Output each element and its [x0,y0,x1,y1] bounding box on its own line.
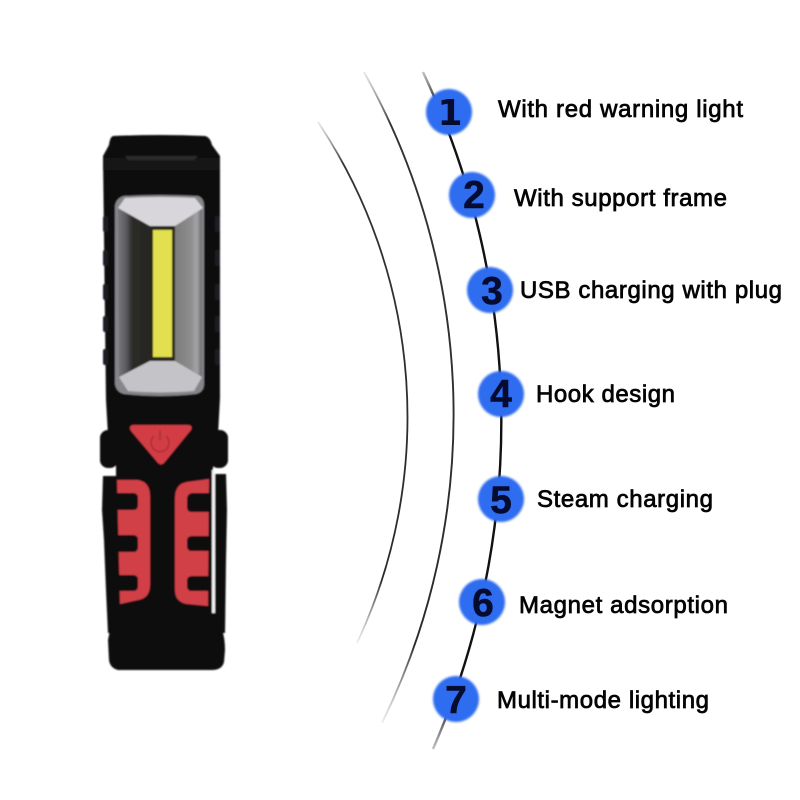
badge 3: 3 [481,270,503,313]
connector arc: outer [423,72,501,749]
label 5: Steam charging [537,486,713,513]
decorative arc: middle [364,72,454,723]
LED frame [150,226,175,361]
light upper housing [103,135,220,435]
label 4: Hook design [536,381,675,408]
white strip [212,470,215,613]
badge 7 [433,676,479,722]
label 1: With red warning light [498,96,743,123]
badge 1 [426,89,472,135]
feature 6 [459,579,728,625]
label 3: USB charging with plug [520,277,782,304]
badge 7: 7 [445,679,467,722]
label 2: With support frame [514,185,727,212]
badge 1: 1 [437,93,463,134]
LED strip [153,230,172,357]
right red grip [175,479,209,606]
lens with COB LED [115,195,204,396]
bottom reflector [119,361,202,392]
top reflector [118,197,203,226]
feature 3 [467,267,782,313]
badge 2 [449,172,495,218]
light lower handle [100,425,228,670]
feature 4 [478,371,675,417]
label 6: Magnet adsorption [519,592,728,619]
left red grip [117,480,150,604]
badge 6: 6 [472,582,494,625]
handle body [116,425,213,635]
foot [108,630,225,670]
feature 1 [426,89,743,135]
red power button [130,425,192,464]
label 7: Multi-mode lighting [497,687,709,714]
right reflector [175,208,202,377]
left reflector [118,208,150,377]
badge 2: 2 [463,174,485,217]
side grips [100,430,118,468]
badge 3 [467,267,513,313]
feature 7 [433,676,709,722]
badge 4: 4 [490,373,512,416]
decorative arc: inner [318,122,407,643]
power icon [151,430,169,452]
feature 5 [478,476,713,522]
badge 5 [478,476,524,522]
grip notches [115,493,211,591]
product photo: work light [100,135,228,670]
badge 6 [459,579,505,625]
feature 2 [449,172,727,218]
badge 5: 5 [490,479,512,522]
badge 4 [478,371,524,417]
